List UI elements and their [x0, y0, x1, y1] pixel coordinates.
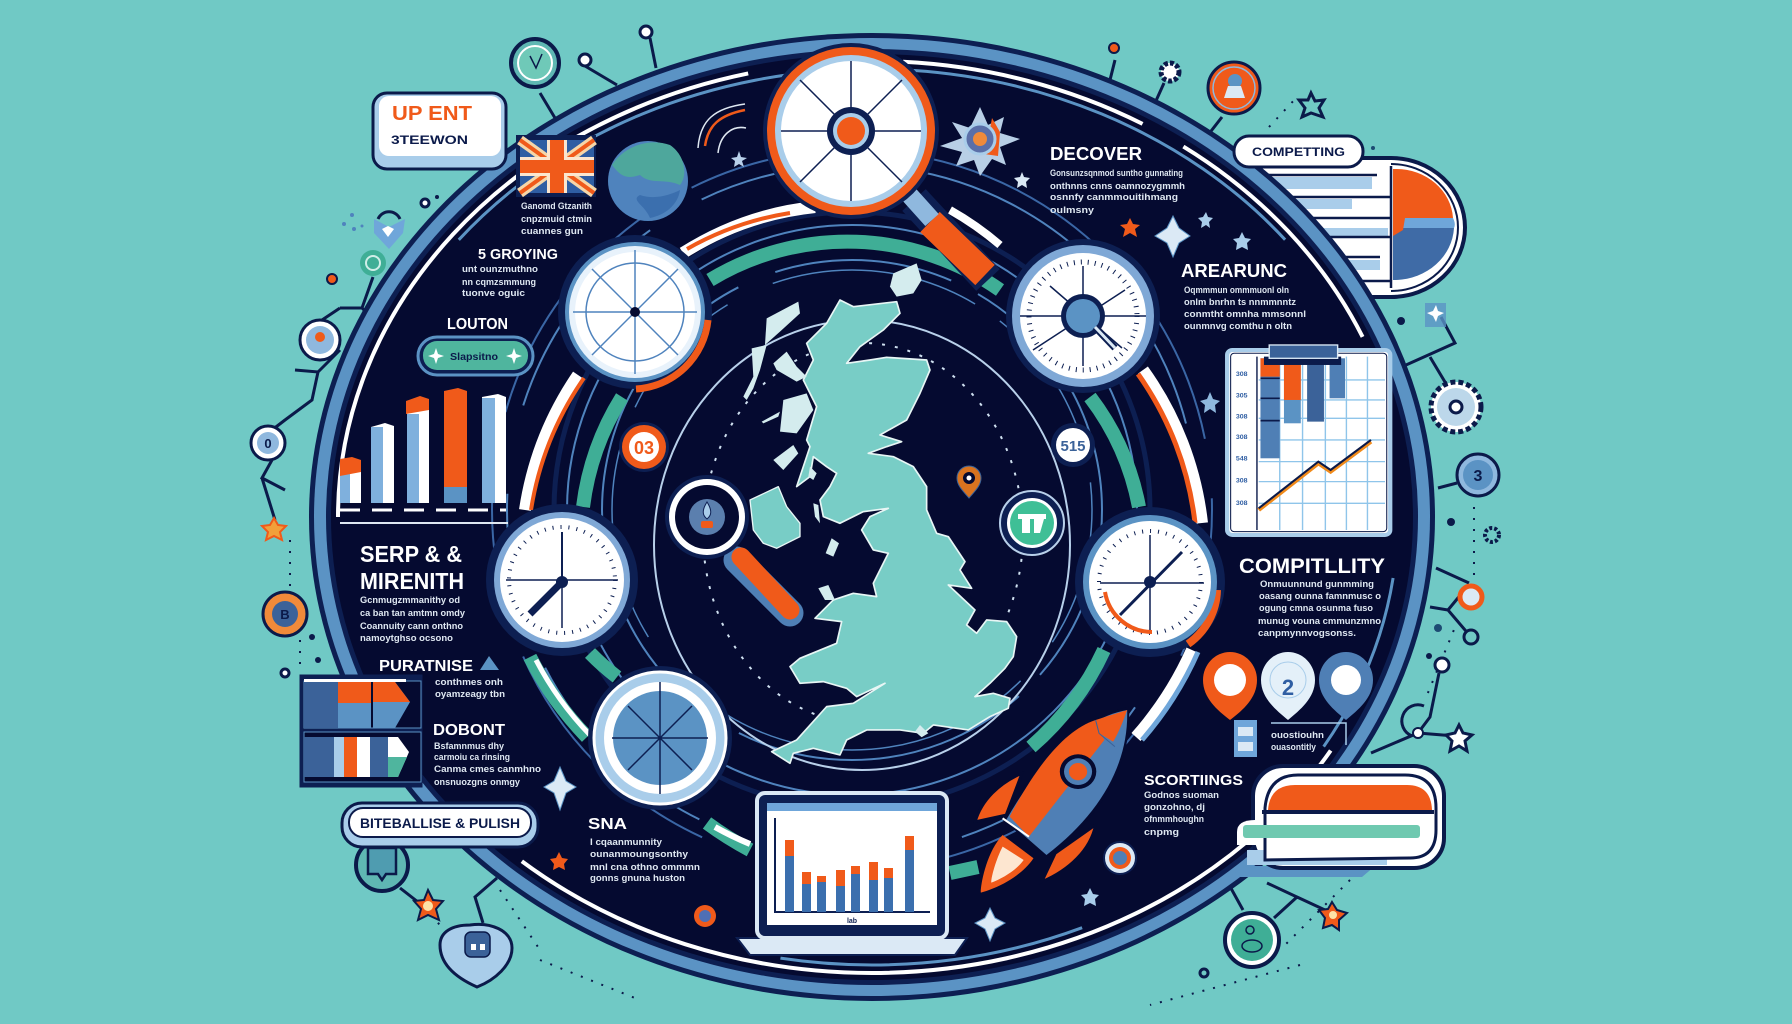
heading: Decover: oulmsny — [1050, 205, 1094, 215]
icon: star left — [262, 518, 286, 540]
chart: bars and trend line: 305 — [1236, 392, 1248, 399]
map pins: three: 2 — [1282, 675, 1294, 700]
node: left orange ring: B — [280, 607, 290, 622]
pill: Competting: COMPETTING — [1252, 145, 1345, 159]
icon: signal waves — [698, 104, 746, 153]
heading: SNA — [588, 816, 700, 883]
heading: Scortiings: cnpmg — [1144, 827, 1179, 837]
chart: arrows — [300, 675, 422, 787]
heading: SNA: ounanmoungsonthy — [590, 849, 688, 859]
heading: Compitllity: munug vouna cmmunzmno — [1258, 616, 1382, 626]
heading: Compitllity — [1239, 555, 1385, 638]
node: bottom left chat — [356, 839, 408, 891]
heading: Compitllity: oasang ounna famnmusc o — [1259, 591, 1382, 601]
node: gear right — [1431, 382, 1481, 432]
pill: Biteballise & Pulish — [342, 803, 538, 847]
heading: 5 Growing: nn cqmzsmmung — [462, 277, 536, 287]
heading: SNA: SNA — [588, 816, 628, 833]
heading: Scortiings: Godnos suoman — [1144, 790, 1219, 800]
node: number 3 — [1457, 454, 1499, 496]
heading: SERP: MIRENITH — [360, 568, 464, 594]
icon: star lower right — [1446, 725, 1472, 751]
heading: Decover: onthnns cnns oamnozygmmh — [1050, 181, 1185, 191]
heading: Dobont: Canma cmes canmhno — [434, 764, 542, 774]
gauge: middle left clock — [486, 504, 638, 656]
node: orange ring right — [1460, 586, 1482, 608]
connector network and outer nodes — [262, 38, 1474, 1005]
icon: small star — [731, 151, 747, 167]
arc bands — [525, 207, 1202, 873]
node: left small red — [327, 274, 337, 284]
icon: orange star bottom right — [1319, 902, 1347, 930]
heading: 5 Growing: 5 GROYING — [478, 246, 558, 263]
heading: Scortiings — [1144, 772, 1243, 837]
icon: shield — [374, 212, 405, 249]
icon: globe — [608, 141, 688, 221]
node: small rings lower right — [1402, 630, 1478, 738]
magnifier: top — [763, 43, 988, 280]
icon: blue sparkle — [1425, 303, 1446, 327]
node: top right orange person — [1208, 62, 1260, 114]
card: striped panel — [1228, 766, 1444, 877]
laptop with bar chart — [737, 793, 967, 955]
block: top left text — [521, 201, 592, 236]
icon: small orange ring bottom left — [694, 905, 716, 927]
heading: Puratnise: PURATNISE — [379, 658, 473, 675]
heading: Arearunc: conmtht omnha mmsonnl — [1184, 309, 1306, 319]
heading: Compitllity: canpmynnvogsonss. — [1258, 628, 1356, 638]
icon: teal sphere — [360, 250, 386, 276]
Great Britain — [772, 300, 1017, 763]
text block: pins caption: ouostiouhn — [1271, 730, 1324, 740]
pill: Biteballise & Pulish: BITEBALLISE & PULISH — [360, 815, 520, 831]
pill: teal button — [418, 337, 533, 375]
heading: Arearunc: ounmnvg comthu n oltn — [1184, 321, 1292, 331]
node: top left teal — [511, 39, 559, 87]
heading: SNA: gonns gnuna huston — [590, 873, 685, 883]
gauge: upper left — [558, 235, 712, 389]
heading: Puratnise — [379, 656, 505, 699]
map pins: three — [1203, 652, 1373, 720]
node: left circle with pin — [300, 320, 340, 360]
icon: small blue marks — [342, 213, 364, 231]
heading: Louton: LOUTON — [447, 316, 508, 333]
heading: Dobont: DOBONT — [433, 722, 505, 739]
gauge: middle right speedometer — [1075, 507, 1225, 657]
chart: bars and trend line: 308 — [1236, 371, 1248, 378]
icon: star top right — [1299, 93, 1324, 117]
node: left orange ring — [263, 592, 307, 636]
heading: Scortiings: ofnmmhoughn — [1144, 814, 1204, 824]
gauge: lower left blue dial — [588, 666, 732, 810]
heading: SERP: SERP & & — [360, 541, 462, 567]
map: United Kingdom — [743, 263, 1017, 763]
heading: Arearunc: Oqmmmun ommmuonl oln — [1184, 285, 1289, 295]
icon: small ring bottom — [1104, 842, 1136, 874]
heading: SERP: ca ban tan amtmn omdy — [360, 608, 465, 618]
callout: UP ENT: 3TEEWON — [391, 133, 468, 147]
heading: Decover: osnnfy canmmouitihmang — [1050, 192, 1178, 202]
callout: UP ENT: UP ENT — [392, 103, 472, 125]
node: small gear right — [1485, 528, 1499, 542]
node: small rings top left — [579, 26, 1119, 66]
badge: 03: 03 — [634, 438, 654, 458]
heading: Dobont — [433, 722, 542, 787]
heading: SERP: Gcnmugzmmanithy od — [360, 595, 460, 605]
heading: Arearunc: onlm bnrhn ts nnmmnntz — [1184, 297, 1297, 307]
icon: decorative stars left — [544, 767, 576, 870]
heading: Puratnise: oyamzeagy tbn — [435, 689, 505, 699]
callout: UP ENT — [373, 93, 506, 169]
gauge: upper right — [1006, 239, 1160, 393]
heading: Decover: Gonsunzsqnmod suntho gunnating — [1050, 168, 1183, 178]
heading: SERP: Coannuity cann onthno — [360, 621, 464, 631]
text block: pins caption — [1271, 723, 1346, 752]
icon: orange star bottom left — [414, 890, 443, 920]
icon: small document — [1234, 720, 1257, 757]
bar chart: left — [340, 388, 508, 523]
block: top left text: cnpzmuid ctmin — [521, 214, 592, 224]
chart: bars and trend line: 308 — [1236, 500, 1248, 507]
heading: Puratnise: conthmes onh — [435, 677, 503, 687]
chart: competing bars and pie — [1240, 158, 1465, 297]
badge: 03 — [619, 422, 669, 472]
heading: Dobont: carmoiu ca rinsing — [434, 752, 510, 762]
heading: SERP — [360, 541, 465, 643]
heading: Dobont: onsnuozgns onmgy — [434, 777, 520, 787]
magnifier: over map — [665, 475, 790, 613]
pill: Competting — [1234, 136, 1363, 167]
heading: Arearunc — [1181, 261, 1306, 331]
badge: 515: 515 — [1060, 438, 1086, 455]
chart: bars and trend line — [1227, 345, 1390, 535]
Northern Ireland — [750, 487, 800, 548]
panel: main dark dial — [309, 33, 1435, 1001]
chart: bars and trend line: 308 — [1236, 434, 1248, 441]
icon: decorative stars right — [1014, 172, 1251, 413]
block: top left text: cuannes gun — [521, 226, 583, 236]
icon: heart badge — [440, 924, 512, 987]
heading: SERP: namoytghso ocsono — [360, 633, 454, 643]
orbit rings — [492, 150, 1212, 870]
node: number 3: 3 — [1474, 468, 1483, 485]
block: top left text: Ganomd Gtzanith — [521, 201, 592, 211]
icon: starburst — [940, 107, 1020, 176]
chart: bars and trend line: 308 — [1236, 413, 1248, 420]
heading: Compitllity: Onmuunnund gunmming — [1260, 579, 1374, 589]
node: left circle 0: 0 — [264, 436, 272, 451]
badge: green logo — [1000, 491, 1064, 555]
pill: teal button: Slapsitno — [450, 352, 498, 363]
badge: 515 — [1051, 423, 1095, 467]
heading: Compitllity: COMPITLLITY — [1239, 555, 1385, 578]
heading: Compitllity: ogung cmna osunma fuso — [1259, 603, 1373, 613]
heading: Scortiings: gonzohno, dj — [1144, 802, 1205, 812]
heading: Decover — [1050, 144, 1185, 215]
heading: SNA: I cqaanmunnity — [590, 837, 662, 847]
heading: 5 Growing: tuonve oguic — [462, 288, 525, 298]
chart: bars and trend line: 548 — [1236, 456, 1248, 463]
icon: union flag — [516, 135, 596, 197]
chart: bars and trend line: 308 — [1236, 478, 1248, 485]
node: left circle 0 — [251, 426, 285, 460]
icon: rocket — [975, 707, 1129, 893]
laptop with bar chart: lab — [847, 918, 857, 925]
heading: 5 Growing: unt ounzmuthno — [462, 264, 539, 274]
node: bottom right teal — [1225, 913, 1279, 967]
heading: Scortiings: SCORTIINGS — [1144, 772, 1243, 789]
Scottish islands — [743, 263, 928, 737]
icon: decorative stars bottom — [975, 888, 1099, 941]
heading: Dobont: Bsfamnmus dhy — [434, 741, 504, 751]
heading: Decover: DECOVER — [1050, 144, 1142, 164]
heading: Arearunc: AREARUNC — [1181, 261, 1287, 281]
heading: SNA: mnl cna othno ommmn — [590, 862, 700, 872]
node: top gear — [1161, 63, 1179, 81]
icon: map pin — [957, 466, 981, 498]
text block: pins caption: ouasontitly — [1271, 742, 1316, 752]
heading: 5 Growing — [462, 246, 558, 298]
